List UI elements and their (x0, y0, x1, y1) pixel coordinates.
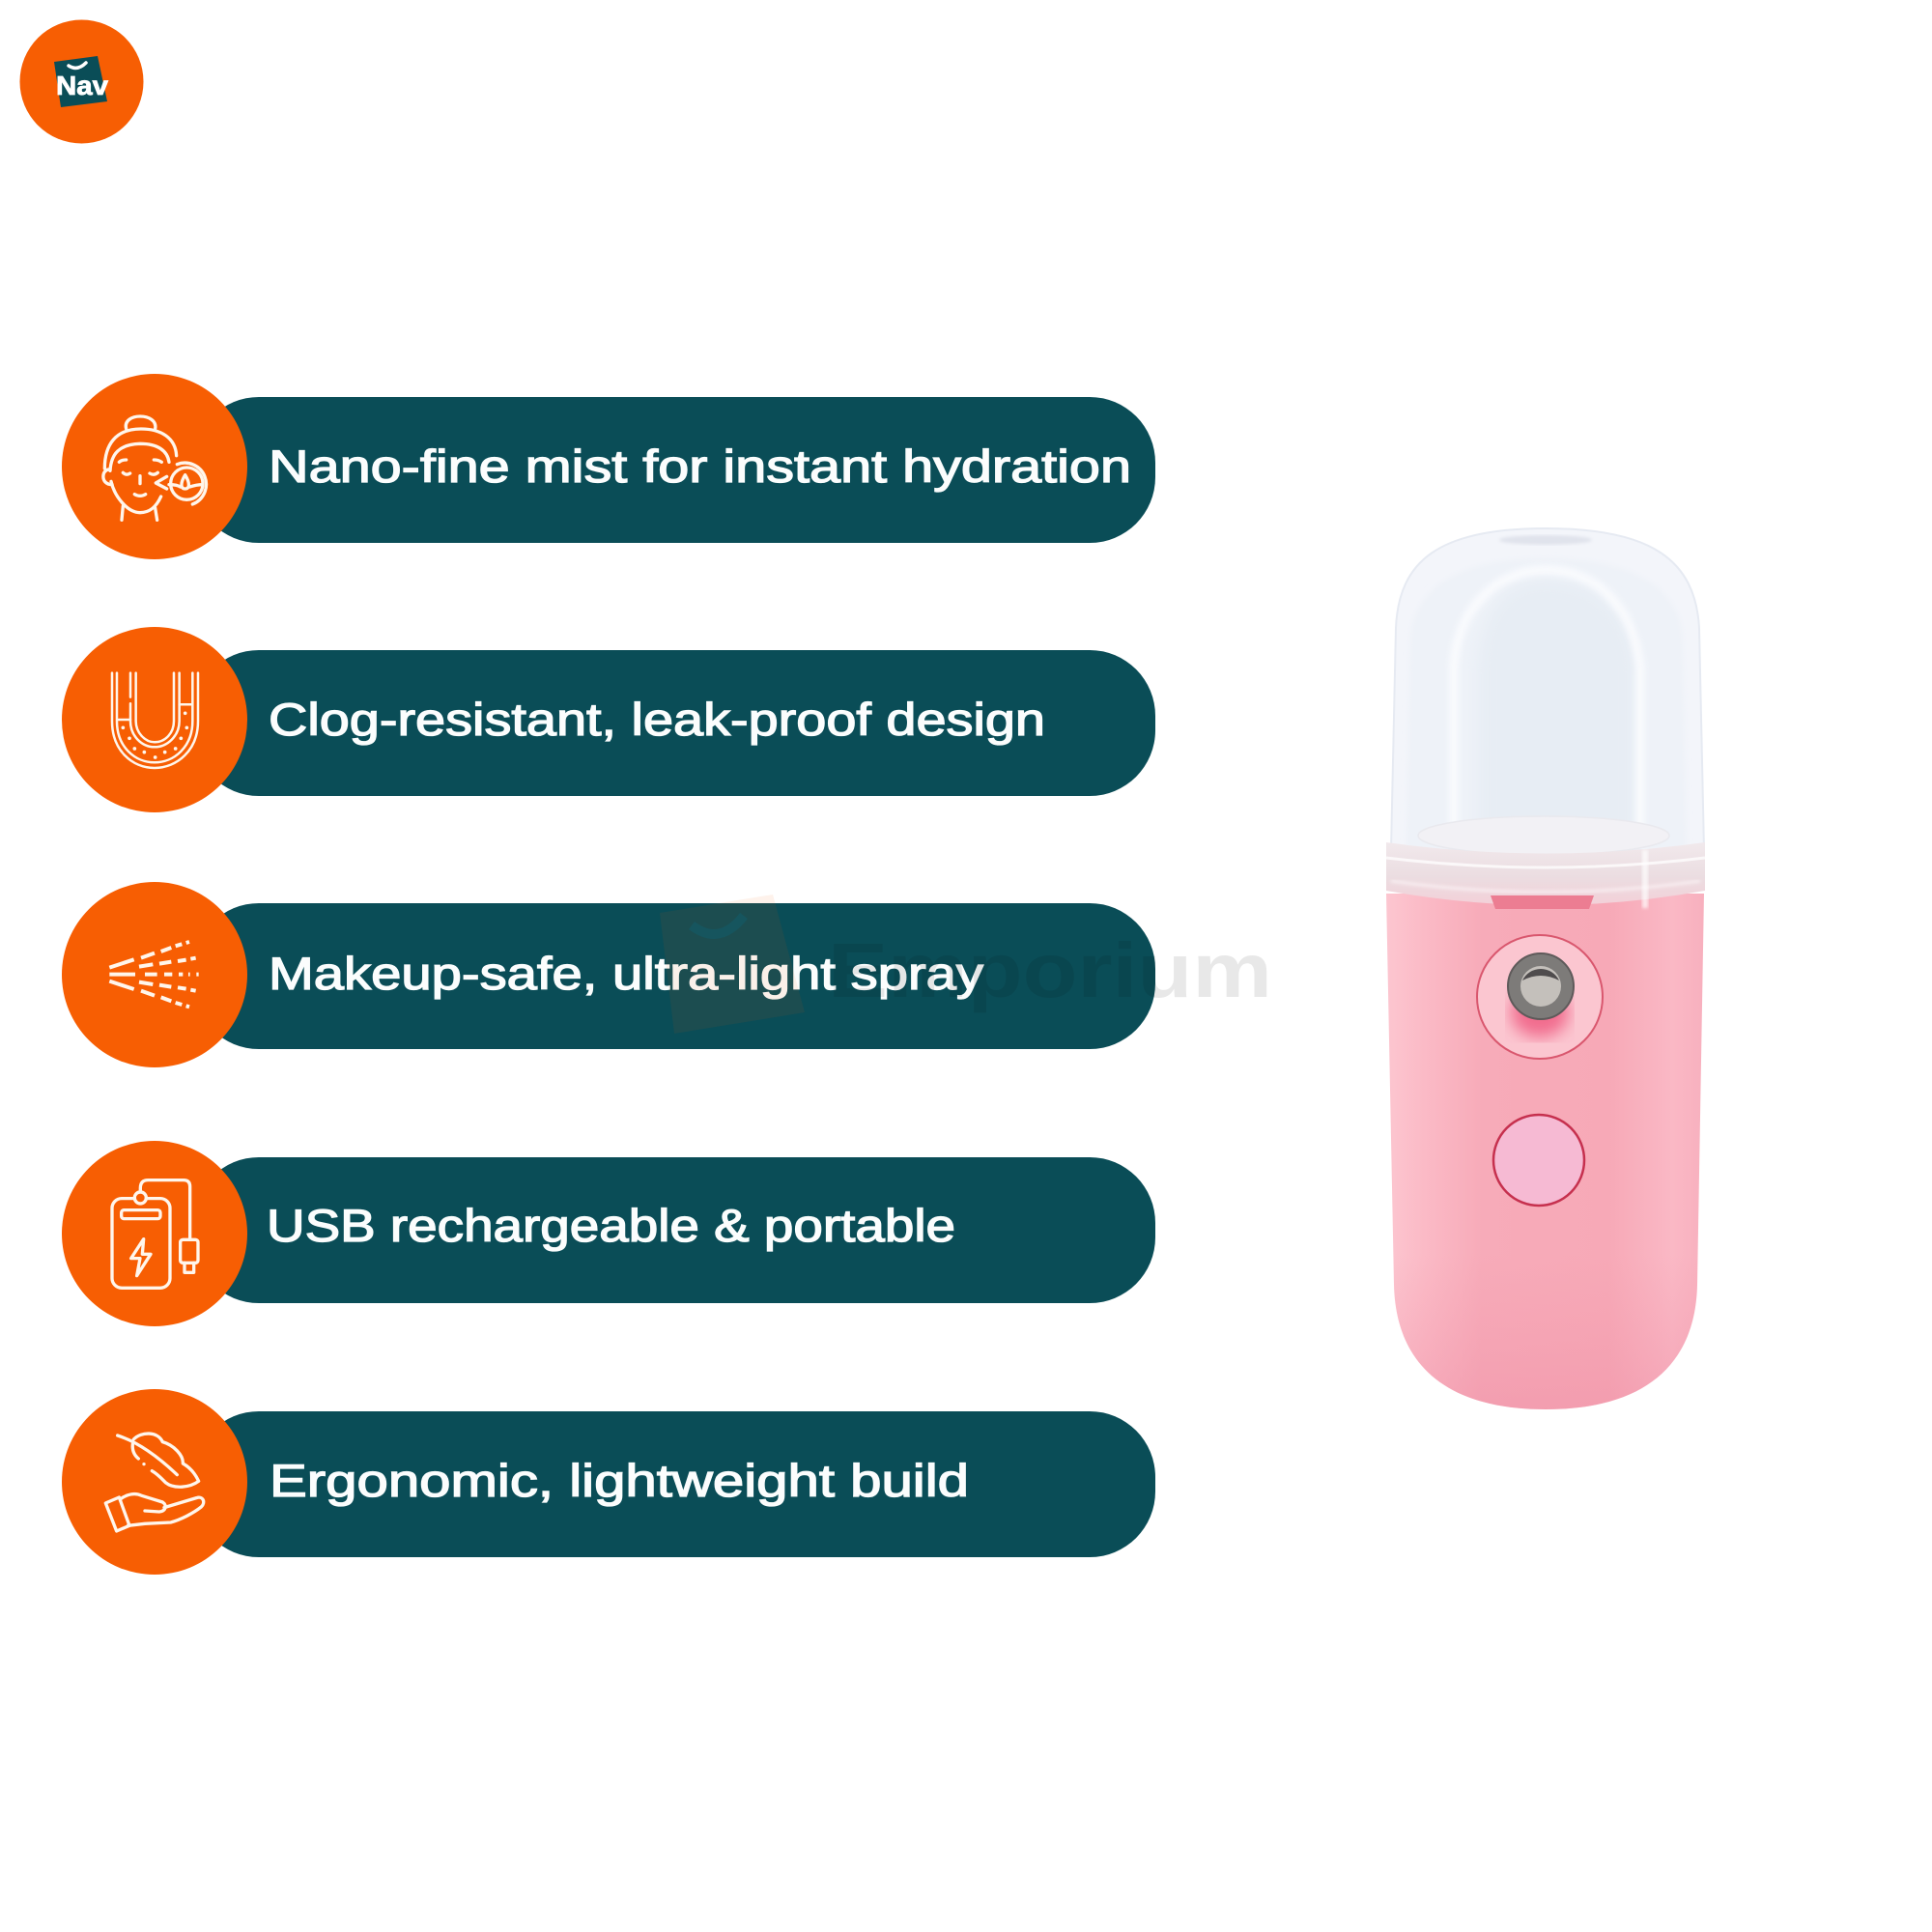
circle 1 (62, 374, 247, 559)
dome inner cylinder (1478, 580, 1637, 840)
collar window (1491, 895, 1594, 909)
circle 4 (62, 1141, 247, 1326)
pill 5 (193, 1411, 1155, 1557)
label 3: Makeup-safe, ultra-light spray (269, 948, 984, 999)
nozzle inner (1520, 966, 1561, 1007)
icon: U-shaped tube (112, 673, 198, 768)
row 3: spray (62, 882, 1155, 1067)
row 4: USB (62, 1141, 1155, 1326)
recess ring (1477, 935, 1603, 1059)
collar highlight (1386, 858, 1705, 867)
icon: spray burst (109, 942, 199, 1007)
label 1: Nano-fine mist for instant hydration (269, 440, 1131, 492)
body bottom shading (1386, 894, 1704, 1409)
collar vertical highlight (1642, 850, 1648, 908)
watermark bag (660, 895, 805, 1034)
watermark wordmark: Emporium (828, 927, 1272, 1013)
product: nano mist sprayer (1386, 528, 1705, 1409)
nozzle metal (1508, 953, 1574, 1019)
label 5: Ergonomic, lightweight build (270, 1455, 969, 1506)
row 2: clog resistant (62, 627, 1155, 812)
pill 1 (193, 397, 1155, 543)
icon: feather over hand (105, 1434, 204, 1531)
pill 2 (193, 650, 1155, 796)
icon: power bank with cable (112, 1180, 198, 1288)
circle 5 (62, 1389, 247, 1575)
watermark smile (692, 916, 744, 934)
glass collar (1386, 842, 1705, 905)
collar lower ridge (1391, 881, 1700, 893)
logo circle (19, 19, 143, 143)
dome highlights (1454, 570, 1640, 831)
row 5: ergonomic (62, 1389, 1155, 1575)
dome inner shade (1406, 558, 1687, 850)
watermark: Nav Emporium (660, 895, 1272, 1034)
row 1: hydration (62, 374, 1155, 559)
logo badge (19, 19, 143, 143)
pill 3 (193, 903, 1155, 1049)
icon: face with water drop (103, 416, 206, 520)
nozzle dark top (1522, 969, 1559, 980)
circle 2 (62, 627, 247, 812)
recess shadow (1511, 987, 1569, 1037)
logo bag (54, 56, 107, 107)
glass dome (1391, 528, 1704, 850)
dome top nozzle hole (1499, 535, 1592, 545)
power button (1493, 1115, 1584, 1206)
logo wordmark: Nav (56, 71, 108, 100)
logo smile (69, 63, 86, 68)
dome inner ridge (1418, 816, 1669, 855)
pink body (1386, 894, 1704, 1409)
label 2: Clog-resistant, leak-proof design (269, 694, 1045, 745)
nozzle recess (1477, 935, 1603, 1059)
circle 3 (62, 882, 247, 1067)
label 4: USB rechargeable & portable (267, 1200, 955, 1251)
pill 4 (193, 1157, 1155, 1303)
